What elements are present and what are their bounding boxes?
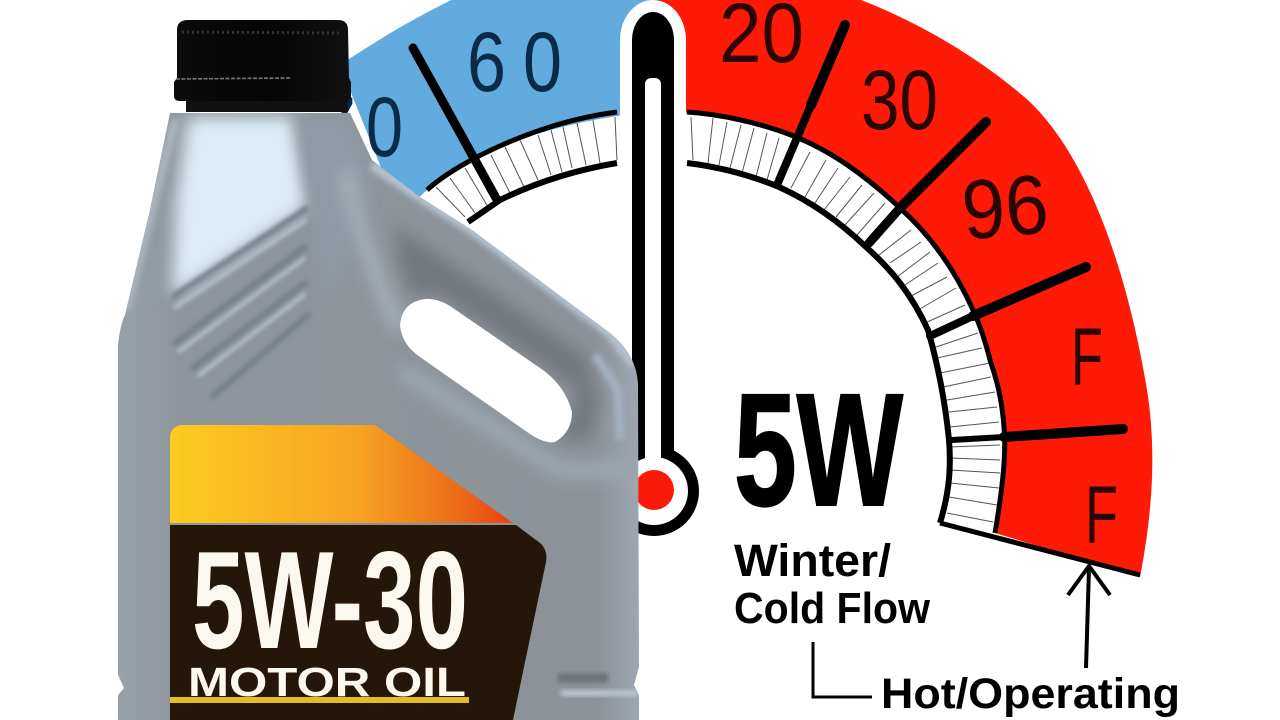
bulb	[609, 446, 699, 536]
thermometer stem	[632, 12, 674, 460]
oil jug	[110, 20, 650, 720]
blue cold arc	[340, 0, 652, 215]
caption: winter cold flow: Cold Flow	[734, 584, 931, 633]
handle shading	[395, 225, 600, 440]
gauge numbers: F	[1071, 312, 1103, 403]
heading: 5W: 5W	[734, 360, 903, 539]
bottom ridge	[558, 673, 608, 683]
gauge: temperature arc: 7	[316, 80, 356, 174]
gauge: temperature arc	[316, 0, 1152, 577]
gauge numbers: 30	[861, 53, 938, 147]
red hot arc	[652, 0, 1152, 577]
minor tick marks	[436, 117, 1000, 522]
thermometer halo	[620, 0, 686, 455]
tick band	[427, 112, 1005, 533]
gauge: temperature arc: 0	[523, 15, 562, 109]
highlight panel	[172, 117, 308, 297]
product grade: 5W-30	[192, 523, 468, 678]
handle opening	[400, 299, 572, 442]
jug body	[110, 105, 650, 720]
yellow underline	[170, 697, 469, 703]
major ticks	[413, 25, 1123, 440]
caption: winter cold flow: Winter/	[734, 535, 891, 586]
label: orange panel	[170, 425, 513, 523]
ribs	[174, 209, 308, 396]
band outlines	[427, 112, 1005, 533]
arrow: up to gauge	[1068, 566, 1110, 668]
gauge: temperature arc: 0	[366, 80, 403, 174]
caption: winter cold flow	[734, 535, 931, 633]
product name: MOTOR OIL	[188, 659, 466, 705]
gauge numbers: F	[1085, 470, 1118, 561]
gauge: temperature arc: 6	[467, 15, 506, 109]
gauge numbers	[719, 0, 1118, 561]
thermometer	[609, 0, 699, 536]
cap	[174, 20, 351, 112]
label: dark panel	[170, 525, 546, 720]
caption: hot operating: Hot/Operating	[881, 670, 1180, 718]
connector line	[813, 642, 872, 697]
gauge base line	[940, 523, 1140, 575]
gauge numbers: 96	[958, 156, 1052, 258]
